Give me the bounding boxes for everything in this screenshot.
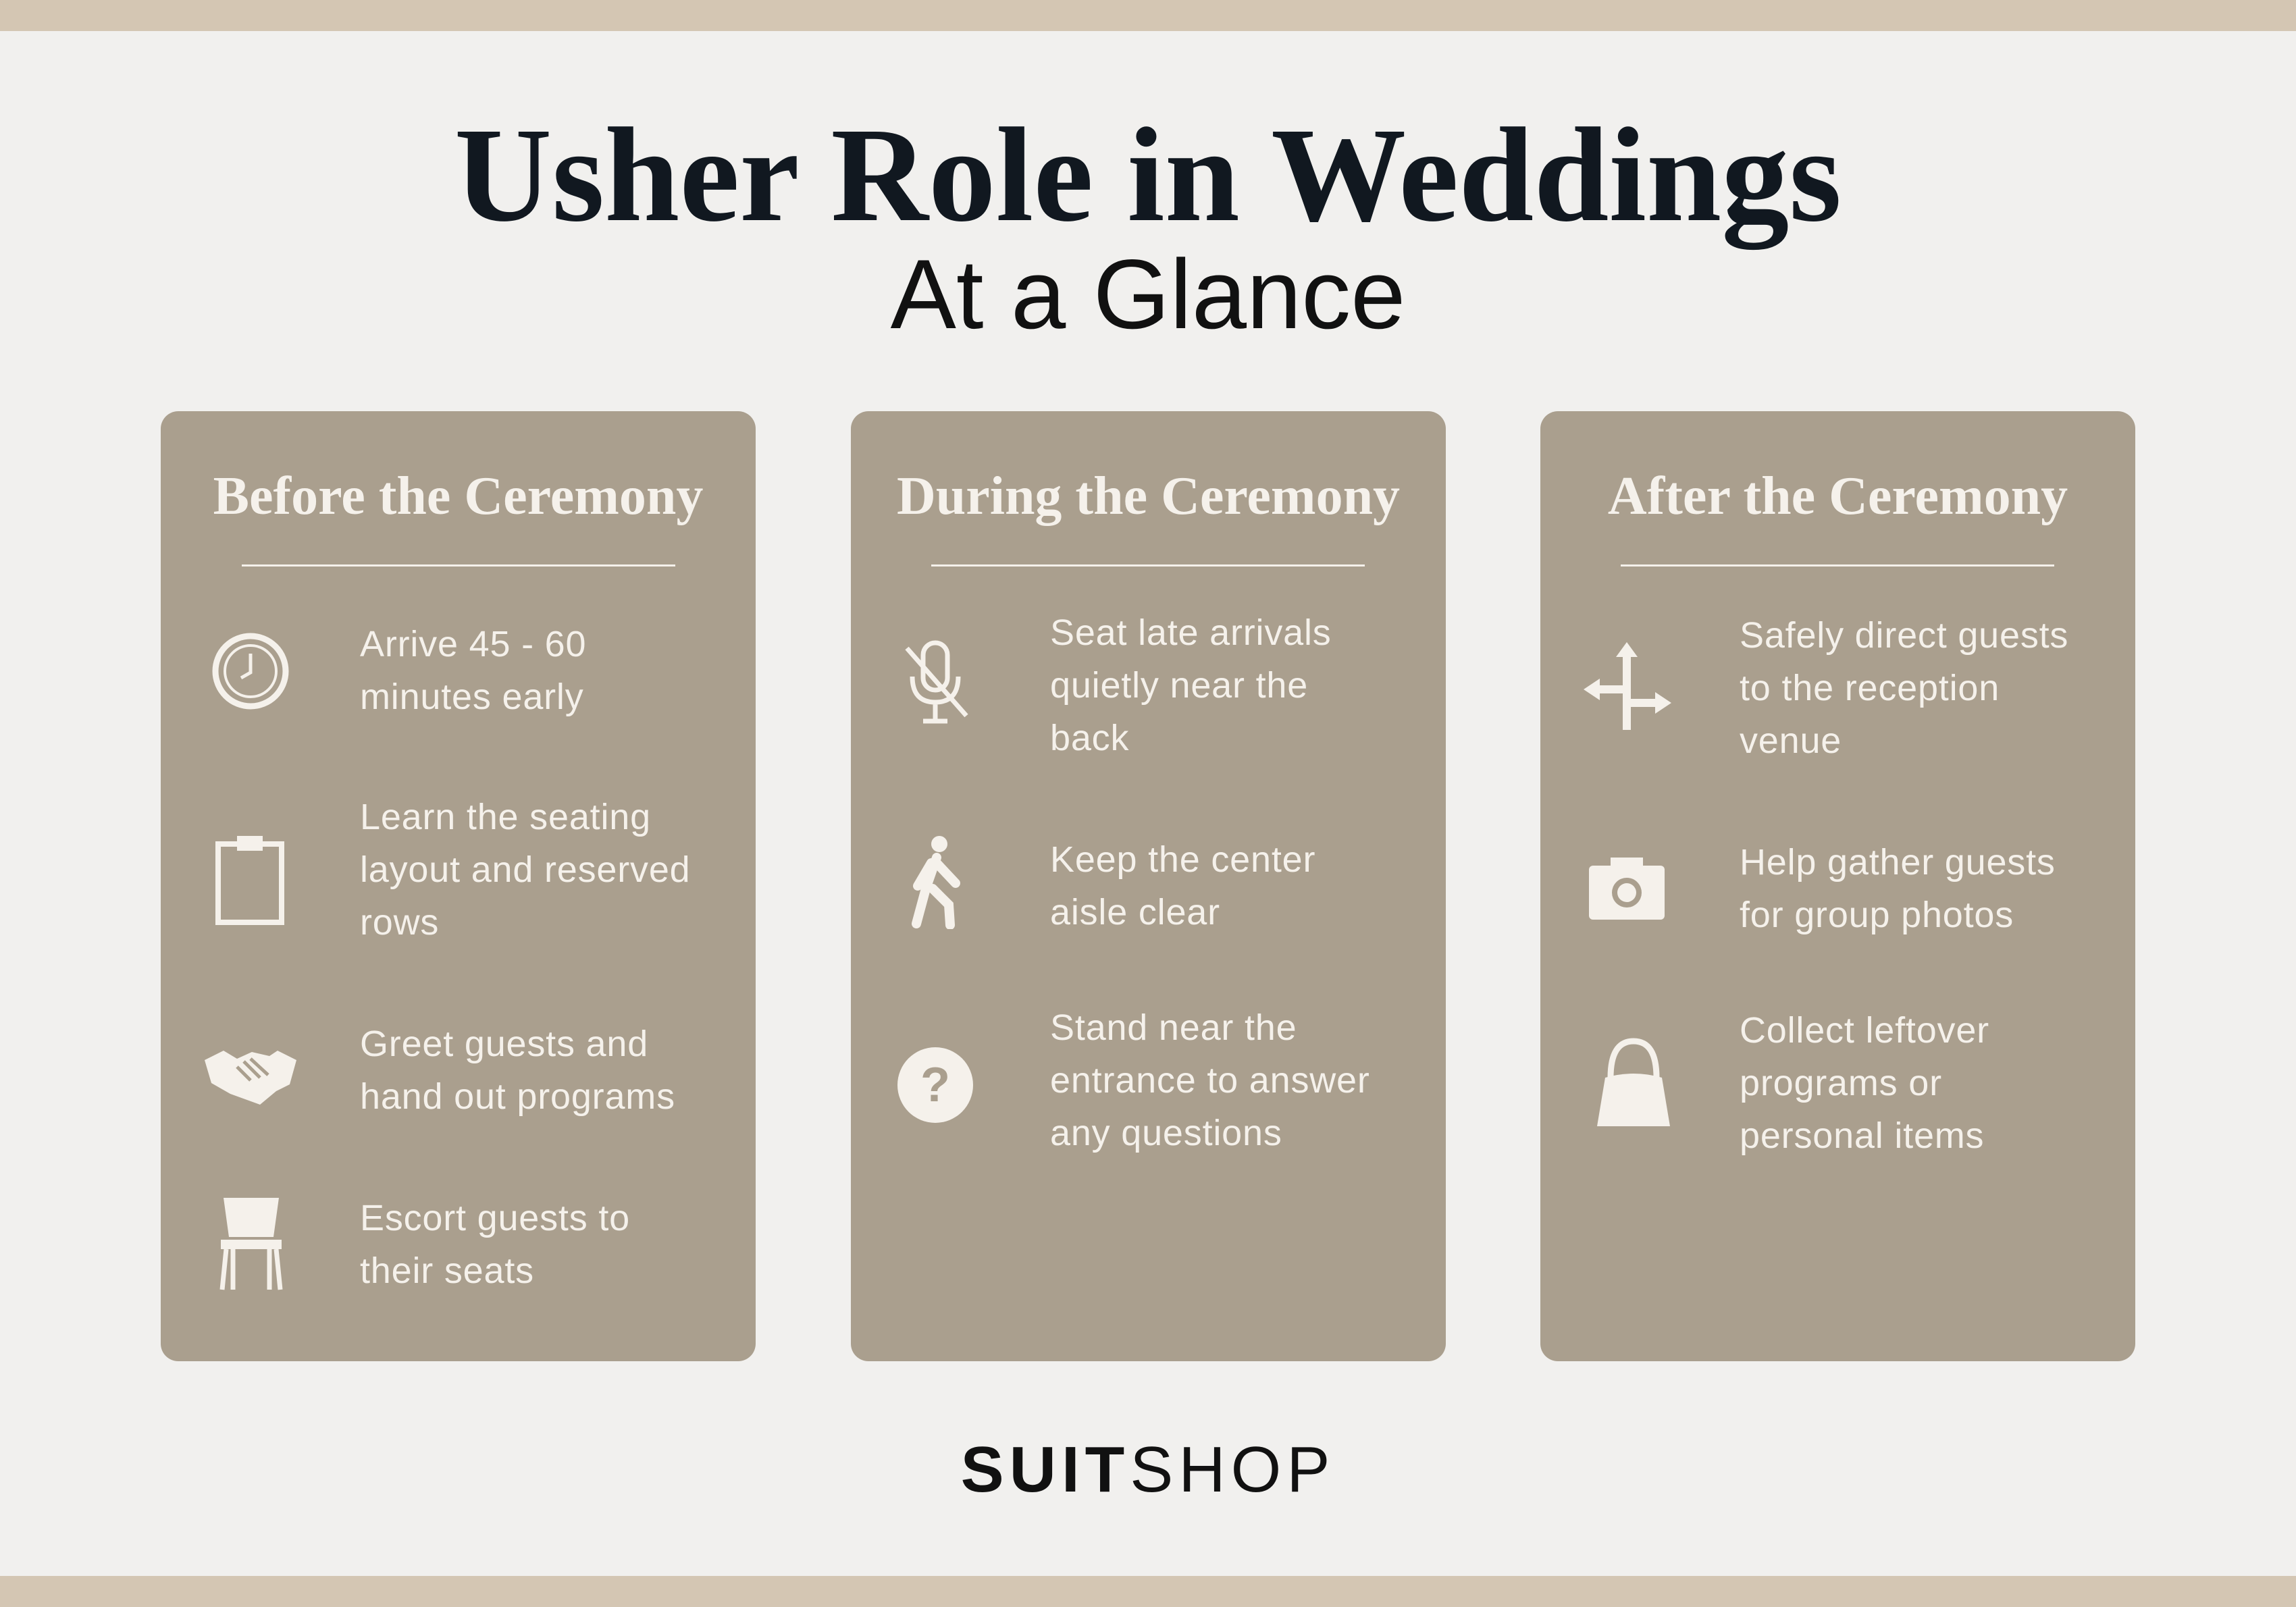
logo: SUITSHOP <box>961 1433 1335 1506</box>
text: collect <box>1740 1010 1989 1156</box>
title: Usher Role in Weddings <box>454 101 1842 250</box>
text: seat late <box>1050 612 1332 758</box>
text: escort: their seats <box>360 1250 534 1291</box>
text: aisle <box>1050 839 1315 932</box>
icon: directions <box>1584 642 1671 730</box>
icon: camera <box>1589 858 1665 920</box>
text: collect: personal items <box>1740 1115 1984 1156</box>
text: greet: Greet guests and <box>360 1024 648 1064</box>
text: escort <box>360 1198 630 1291</box>
text: direct: Safely direct guests <box>1740 615 2068 656</box>
text: seating: rows <box>360 902 439 943</box>
icon: muted mic <box>905 640 968 724</box>
text: arrive <box>360 624 586 717</box>
text: direct: venue <box>1740 720 1842 761</box>
text: seat late: Seat late arrivals <box>1050 612 1332 653</box>
text: stand: any questions <box>1050 1113 1282 1153</box>
text: seating <box>360 797 690 943</box>
text: direct <box>1740 615 2068 761</box>
text: seating: layout and reserved <box>360 849 690 890</box>
text: photos <box>1740 842 2056 935</box>
text: photos: for group photos <box>1740 895 2014 935</box>
icon: chair <box>220 1198 282 1290</box>
text: photos: Help gather guests <box>1740 842 2056 882</box>
icon: clock <box>212 633 289 709</box>
text: seat late: quietly near the <box>1050 665 1308 706</box>
icon: walking <box>912 836 960 929</box>
text: seating: Learn the seating <box>360 797 651 837</box>
text: stand <box>1050 1007 1370 1153</box>
text: collect: Collect leftover <box>1740 1010 1989 1051</box>
text: stand: entrance to answer <box>1050 1060 1370 1101</box>
panel: during <box>851 411 1446 1361</box>
text: seat late: back <box>1050 718 1129 758</box>
text: aisle: Keep the center <box>1050 839 1315 880</box>
text: greet <box>360 1024 675 1117</box>
text: greet: hand out programs <box>360 1076 675 1117</box>
icon: clipboard <box>215 836 284 925</box>
icon: bag <box>1597 1038 1670 1126</box>
text: direct: to the reception <box>1740 668 2000 708</box>
panel: after <box>1540 411 2135 1361</box>
text: aisle: aisle clear <box>1050 892 1220 932</box>
subtitle: At a Glance <box>891 239 1405 349</box>
heading: after: After the Ceremony <box>1608 467 2068 526</box>
panel: before <box>161 411 756 1361</box>
icon: handshake <box>205 1051 296 1105</box>
icon: question: ? <box>920 1058 950 1112</box>
heading: during: During the Ceremony <box>897 467 1400 526</box>
heading: before: Before the Ceremony <box>213 467 703 526</box>
icon: question <box>897 1047 973 1123</box>
text: arrive: minutes early <box>360 677 584 717</box>
text: collect: programs or <box>1740 1063 1942 1103</box>
text: arrive: Arrive 45 - 60 <box>360 624 586 664</box>
text: escort: Escort guests to <box>360 1198 630 1238</box>
text: stand: Stand near the <box>1050 1007 1297 1048</box>
